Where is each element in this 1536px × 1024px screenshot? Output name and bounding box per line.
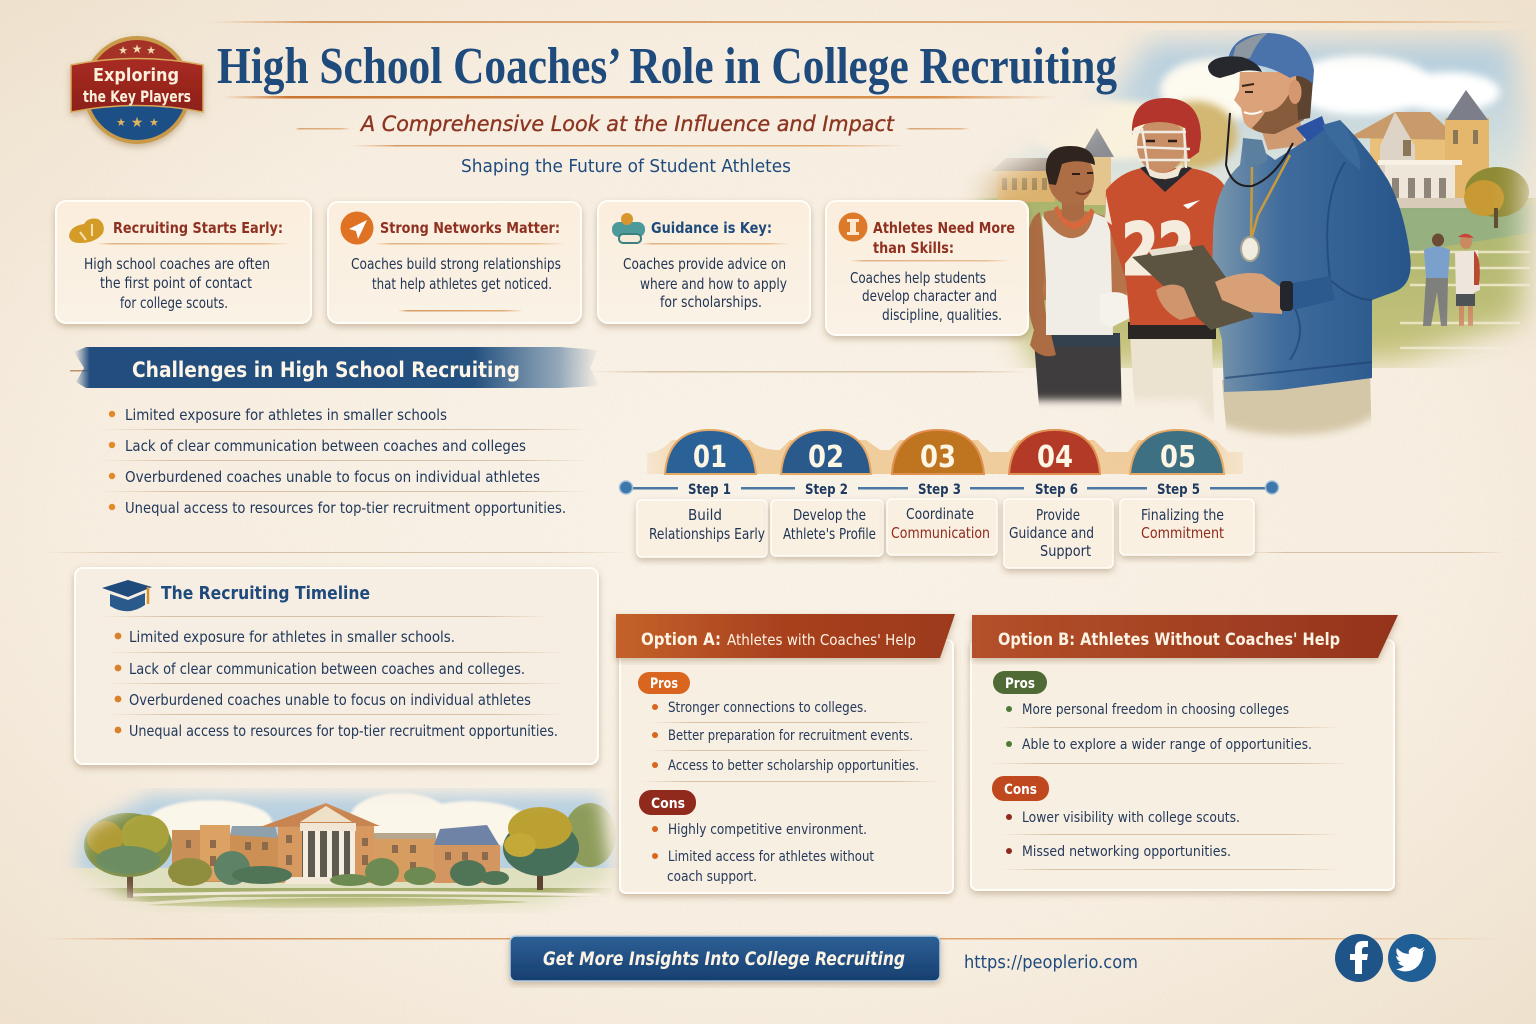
step card 5: Finalizing the [1141, 506, 1224, 524]
torso skin and arms [1044, 209, 1104, 300]
left campus building [992, 128, 1114, 205]
icon: graduation cap [102, 580, 152, 611]
khaki pants [1222, 368, 1372, 450]
coach in blue hoodie with clipboard [1132, 33, 1411, 450]
step card 4: Support [1040, 542, 1091, 560]
panel: Option B: Lower visibility with college scouts. [1022, 810, 1240, 826]
title: High School Coaches’ Role in College Recruiting [217, 38, 1117, 95]
section banner: Challenges: Challenges in High School Recruiting [132, 358, 520, 382]
shrubs [168, 851, 509, 886]
step domes: 01 [693, 440, 727, 475]
stars: ★ [132, 42, 142, 56]
neck [1262, 118, 1304, 150]
panel: Option A: Stronger connections to colleges. [668, 700, 867, 716]
list: challenges: Limited exposure for athletes in smaller schools [125, 406, 447, 424]
section banner: Challenges [70, 347, 1030, 388]
whistle cord [1226, 113, 1293, 186]
connector line [620, 481, 1278, 494]
cons pill [639, 790, 696, 815]
list: challenges: Overburdened coaches unable to focus on individual athletes [125, 468, 540, 486]
lawn [80, 888, 612, 902]
panel: Recruiting Starts Early [56, 201, 311, 323]
panel: Athletes Need More than Skills [826, 201, 1028, 335]
subtitle: A Comprehensive Look at the Influence and Impact [359, 112, 895, 136]
process steps timeline: Step 5 [1157, 482, 1200, 498]
panel: Option A: Highly competitive environment. [668, 822, 867, 838]
panel: Guidance is Key: where and how to apply [640, 275, 787, 293]
step domes: 04 [1037, 440, 1073, 475]
panel: Strong Networks Matter: Strong Networks Matter: [380, 219, 560, 237]
tan band [647, 440, 1243, 474]
pros pill [993, 671, 1047, 694]
pros pill [638, 672, 690, 694]
step card 5: Commitment [1141, 524, 1224, 542]
panel: The Recruiting Timeline: Overburdened coaches unable to focus on individual athletes [129, 691, 531, 709]
panel: Guidance is Key: Guidance is Key: [651, 219, 772, 237]
list: challenges: Unequal access to resources for top-tier recruitment opportunities. [125, 499, 566, 517]
icon: orange medal [838, 212, 868, 242]
footer rule [45, 938, 1505, 940]
hoodie body [1212, 120, 1411, 392]
college building [172, 803, 500, 884]
step card 3: Communication [891, 524, 990, 542]
process steps timeline: Step 1 [688, 482, 731, 498]
step domes [665, 430, 1224, 475]
panel: Recruiting Starts Early: for college scouts. [120, 294, 228, 312]
header: Option B [972, 615, 1398, 658]
panel: Guidance is Key: Coaches provide advice on [623, 255, 786, 273]
athlete in white tank top [1026, 146, 1130, 420]
step card 1 [637, 500, 767, 557]
football player in red jersey and helmet [1105, 98, 1224, 425]
stars: ★ [146, 44, 156, 57]
icon: orange pointer [340, 212, 374, 244]
panel: The Recruiting Timeline [75, 568, 598, 764]
step card 4: Provide [1036, 506, 1080, 524]
panel: Athletes Need More than Skills: Coaches help students [850, 269, 986, 287]
badge: Exploring the Key Players: Exploring [93, 65, 179, 86]
badge: Exploring the Key Players: the Key Players [83, 87, 191, 106]
panel: Option B: Able to explore a wider range of opportunities. [1022, 737, 1312, 753]
step card 2: Athlete's Profile [783, 525, 876, 543]
panel: Athletes Need More than Skills: than Skills: [873, 239, 954, 257]
panel: Recruiting Starts Early: High school coaches are often [84, 255, 270, 273]
panel: The Recruiting Timeline: The Recruiting Timeline [161, 584, 370, 604]
campus illustration [60, 788, 620, 913]
top decorative rule [210, 21, 1520, 23]
pros pill: Pros [650, 676, 678, 692]
website link: https://peoplerio.com [964, 952, 1138, 973]
panel: Option A: Access to better scholarship opportunities. [668, 758, 919, 774]
step card 2 [771, 500, 883, 556]
step domes: 05 [1160, 440, 1196, 475]
cons pill: Cons [651, 796, 685, 812]
tagline: Shaping the Future of Student Athletes [461, 156, 791, 177]
stars: ★ [149, 116, 159, 129]
panel: Option A [616, 614, 955, 893]
step card 1: Relationships Early [649, 525, 765, 543]
right campus building with tower [1348, 90, 1489, 208]
panel: Option B [971, 615, 1398, 890]
trees [84, 803, 616, 898]
step card 3: Coordinate [906, 505, 974, 523]
panel: The Recruiting Timeline: Limited exposure for athletes in smaller schools. [129, 628, 455, 646]
panel: Athletes Need More than Skills: develop character and [862, 287, 997, 305]
icon: teal guide [612, 213, 645, 243]
process steps timeline: Step 2 [805, 482, 848, 498]
step card 4 [1004, 499, 1113, 568]
header: Option A [616, 614, 955, 658]
call-to-action button [510, 936, 940, 981]
call-to-action button: Get More Insights Into College Recruiting [543, 948, 905, 970]
list: challenges [100, 406, 590, 517]
lanyard and medal [1251, 155, 1290, 240]
panel: Athletes Need More than Skills: discipline, qualities. [882, 306, 1002, 324]
sleeve folds and waistband [1225, 162, 1372, 378]
hood and collar [1243, 138, 1268, 166]
panel: Option A: coach support. [667, 869, 757, 885]
step domes: 03 [920, 440, 956, 475]
hands and watch [1156, 284, 1196, 320]
process steps timeline: Step 3 [918, 482, 961, 498]
badge: Exploring the Key Players [71, 36, 203, 144]
panel: Guidance is Key [598, 201, 810, 323]
stars [116, 42, 159, 131]
autumn tree [1464, 167, 1529, 228]
face [1234, 72, 1302, 132]
football player in red jersey and helmet: 22 [1122, 209, 1194, 291]
divider [40, 552, 630, 553]
panel: The Recruiting Timeline: Unequal access to resources for top-tier recruitment opportunities. [129, 722, 558, 740]
panel: Strong Networks Matter: Coaches build strong relationships [351, 255, 561, 273]
step card 5 [1120, 499, 1254, 555]
step card 3 [887, 499, 997, 555]
stars: ★ [118, 44, 128, 57]
icon: gold handshake [69, 219, 104, 243]
step card 2: Develop the [793, 506, 866, 524]
panel: Option A: Limited access for athletes without [668, 849, 874, 865]
panel: The Recruiting Timeline: Lack of clear communication between coaches and colleges. [129, 660, 525, 678]
stars: ★ [131, 115, 143, 131]
clipboard [1132, 245, 1254, 330]
process steps timeline [620, 430, 1278, 568]
stars: ★ [116, 116, 126, 129]
panel: Option B: Missed networking opportunities. [1022, 844, 1231, 860]
hero illustration: coach and athletes on campus [955, 30, 1536, 450]
cons pill [992, 776, 1049, 801]
step card 4: Guidance and [1009, 524, 1094, 542]
distant conversation figures [1423, 234, 1480, 326]
scenic backdrop: sky, campus buildings and field [955, 30, 1536, 368]
pros pill: Pros [1005, 676, 1035, 692]
panel: Strong Networks Matter: that help athletes get noticed. [372, 275, 552, 293]
panel: Option A: Better preparation for recruitment events. [668, 728, 913, 744]
panel: Guidance is Key: for scholarships. [660, 293, 762, 311]
list: challenges: Lack of clear communication between coaches and colleges [125, 437, 526, 455]
panel: Option B: More personal freedom in choosing colleges [1022, 702, 1289, 718]
step card 1: Build [688, 506, 722, 524]
process steps timeline: Step 6 [1035, 482, 1078, 498]
icon: twitter [1388, 934, 1436, 982]
header: Option A: Athletes with Coaches' Help [727, 631, 916, 649]
panel: Strong Networks Matter [328, 202, 581, 323]
header: Option B: Option B: Athletes Without Coaches' Help [998, 630, 1340, 650]
step domes: 02 [808, 440, 844, 475]
header: Option A: Option A: [641, 630, 721, 649]
panel: Recruiting Starts Early: the first point of contact [100, 274, 252, 292]
baseball cap [1228, 33, 1314, 84]
icon: facebook [1335, 934, 1383, 982]
panel: Athletes Need More than Skills: Athletes Need More [873, 219, 1015, 237]
cons pill: Cons [1004, 782, 1037, 798]
panel: Recruiting Starts Early: Recruiting Starts Early: [113, 219, 283, 237]
three figures [1026, 33, 1411, 450]
